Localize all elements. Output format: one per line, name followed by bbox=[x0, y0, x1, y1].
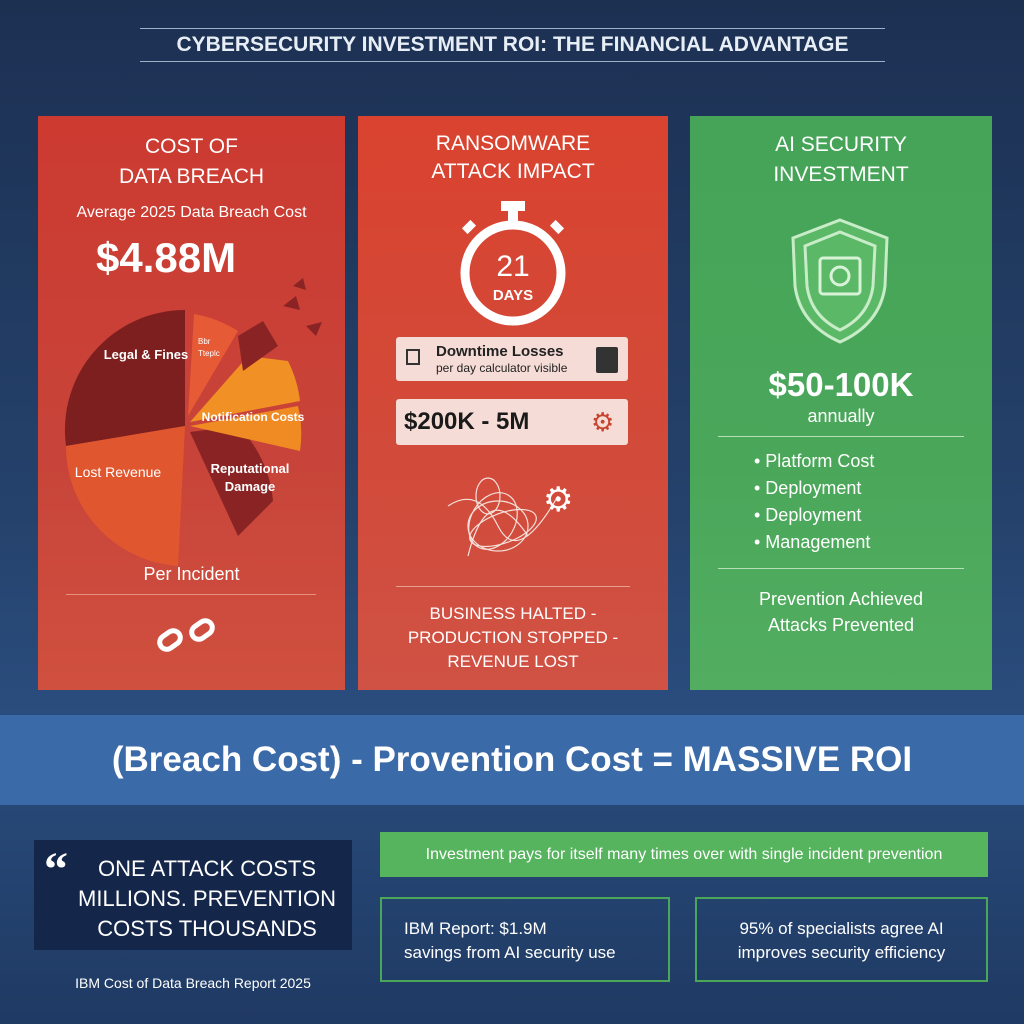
stat box: ibm: savings from AI security use bbox=[404, 943, 616, 962]
quote box: ONE ATTACK COSTS bbox=[98, 856, 316, 881]
panel: ransomware attack impact bbox=[358, 116, 668, 690]
icon: broken chain bbox=[157, 618, 215, 652]
pie chart bbox=[64, 278, 322, 566]
cost range box: $200K - 5M bbox=[404, 408, 529, 435]
green callout: Investment pays for itself many times over with single incident prevention bbox=[426, 846, 942, 863]
stat box: 95%: improves security efficiency bbox=[738, 943, 945, 962]
downtime losses box: per day calculator visible bbox=[436, 361, 567, 375]
pie chart: Legal & Fines bbox=[104, 347, 188, 362]
heading: ransomware: ATTACK IMPACT bbox=[431, 160, 595, 183]
banner: formula: (Breach Cost) - Provention Cost = MASSIVE ROI bbox=[112, 740, 912, 779]
title bbox=[140, 28, 885, 62]
icon: tangled thread: ⚙ bbox=[543, 481, 573, 519]
prevention text: Attacks Prevented bbox=[768, 615, 914, 635]
per incident label: Per Incident bbox=[143, 564, 240, 584]
stat box: 95% bbox=[695, 897, 988, 982]
heading: cost of data breach bbox=[119, 135, 264, 188]
heading: ransomware: RANSOMWARE bbox=[436, 132, 590, 155]
pie chart: Bbr bbox=[198, 337, 211, 346]
bullet list: • Platform Cost bbox=[754, 451, 874, 471]
bullet list: • Deployment bbox=[754, 505, 861, 525]
green callout bbox=[380, 832, 988, 877]
bullet list bbox=[754, 451, 874, 552]
pie chart: Lost Revenue bbox=[75, 464, 161, 480]
pie chart: Notification Costs bbox=[202, 410, 305, 424]
panel: ai security investment: annually bbox=[807, 406, 875, 426]
icon: stopwatch 21 days bbox=[460, 201, 566, 326]
pie chart: Reputational bbox=[211, 461, 289, 476]
quote box bbox=[34, 840, 352, 950]
subtitle: Average 2025 Data Breach Cost bbox=[76, 204, 307, 221]
quote box: COSTS THOUSANDS bbox=[97, 916, 317, 941]
heading: ai security: INVESTMENT bbox=[773, 163, 909, 186]
banner: formula bbox=[0, 715, 1024, 805]
pie chart: Damage bbox=[225, 479, 275, 494]
heading: ai security: AI SECURITY bbox=[775, 133, 907, 156]
heading: ai security bbox=[773, 133, 909, 186]
prevention text bbox=[759, 589, 923, 635]
prevention text: Prevention Achieved bbox=[759, 589, 923, 609]
text: business halted bbox=[408, 604, 618, 671]
text: business halted: REVENUE LOST bbox=[447, 652, 579, 671]
panel: cost of data breach bbox=[38, 116, 345, 690]
heading: cost of data breach: DATA BREACH bbox=[119, 165, 264, 188]
cost range box: ⚙ bbox=[591, 407, 614, 437]
source: IBM Cost of Data Breach Report 2025 bbox=[75, 975, 311, 991]
bullet list: • Management bbox=[754, 532, 870, 552]
cost range box bbox=[396, 399, 628, 445]
icon: shield with vault bbox=[792, 218, 888, 344]
stat box: ibm: IBM Report: $1.9M bbox=[404, 919, 547, 938]
panel: ai security investment bbox=[690, 116, 992, 690]
title: CYBERSECURITY INVESTMENT ROI: THE FINANCIAL ADVANTAGE bbox=[176, 33, 849, 56]
text: business halted: BUSINESS HALTED - bbox=[430, 604, 596, 623]
price: $50-100K bbox=[769, 366, 913, 403]
stat box: ibm bbox=[380, 897, 670, 982]
icon: stopwatch 21 days: DAYS bbox=[493, 287, 533, 304]
text: business halted: PRODUCTION STOPPED - bbox=[408, 628, 618, 647]
icon: stopwatch 21 days: 21 bbox=[496, 250, 530, 283]
heading: cost of data breach: COST OF bbox=[145, 135, 238, 158]
downtime losses box bbox=[396, 337, 628, 381]
stat box: 95%: 95% of specialists agree AI bbox=[739, 919, 944, 938]
bullet list: • Deployment bbox=[754, 478, 861, 498]
heading: ransomware bbox=[431, 132, 595, 183]
quote box: MILLIONS. PREVENTION bbox=[78, 886, 336, 911]
downtime losses box: Downtime Losses bbox=[436, 343, 564, 360]
pie chart: Tteplc bbox=[198, 349, 220, 358]
quote box: “ bbox=[44, 843, 68, 896]
big number: $4.88M bbox=[96, 234, 236, 281]
icon: tangled thread bbox=[448, 477, 573, 556]
